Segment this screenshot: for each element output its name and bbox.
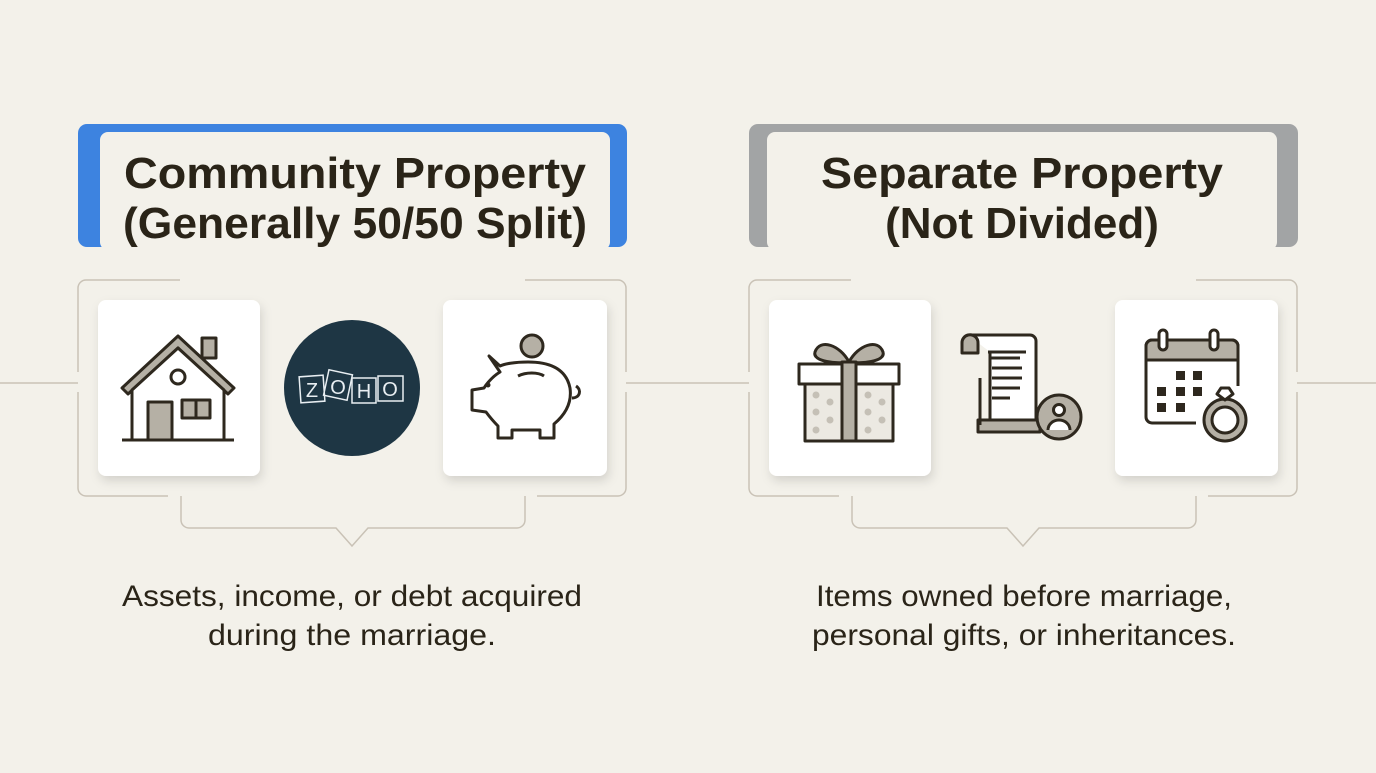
icon card: house bbox=[98, 300, 260, 476]
panel: community property bbox=[78, 124, 627, 652]
icon card: gift bbox=[769, 300, 931, 476]
description: separate property bbox=[812, 580, 1236, 652]
description: community property: Assets, income, or debt acquired bbox=[122, 580, 582, 613]
bracket frame bbox=[78, 280, 626, 546]
icon card: piggy bank bbox=[443, 300, 607, 476]
description: community property bbox=[122, 580, 582, 652]
heading: separate property: (Not Divided) bbox=[885, 199, 1159, 248]
description: separate property: personal gifts, or inheritances. bbox=[812, 619, 1236, 652]
logo: zoho: O bbox=[330, 377, 346, 399]
heading: community property: Community Property bbox=[124, 149, 587, 198]
heading: separate property bbox=[749, 124, 1298, 250]
logo: zoho: Z bbox=[306, 380, 318, 402]
heading: separate property: Separate Property bbox=[821, 149, 1224, 198]
icon card: calendar ring bbox=[1115, 300, 1278, 476]
heading: community property: (Generally 50/50 Split) bbox=[123, 199, 587, 248]
bracket frame bbox=[749, 280, 1297, 546]
icon: will scroll bbox=[962, 335, 1081, 439]
description: separate property: Items owned before marriage, bbox=[816, 580, 1232, 613]
panel: separate property bbox=[749, 124, 1298, 652]
logo: zoho: O bbox=[382, 379, 398, 401]
logo: zoho bbox=[284, 320, 420, 456]
logo: zoho: H bbox=[357, 381, 371, 403]
description: community property: during the marriage. bbox=[208, 619, 496, 652]
heading: community property bbox=[78, 124, 627, 250]
